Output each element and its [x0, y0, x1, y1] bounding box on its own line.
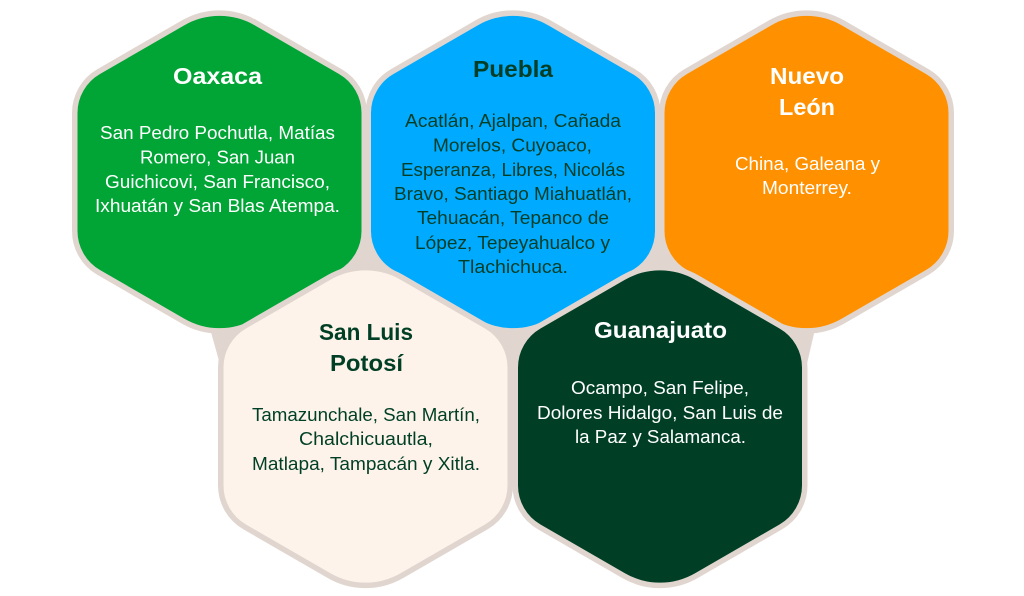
- text: Puebla municipalities: Morelos, Cuyoaco,: [433, 136, 592, 156]
- text: Puebla municipalities: Acatlán, Ajalpan, Cañada: [405, 111, 622, 131]
- text: Oaxaca municipalities: San Pedro Pochutla, Matías: [100, 123, 335, 143]
- text: Nuevo León municipalities: China, Galeana y: [735, 154, 880, 174]
- heading: Oaxaca: Oaxaca: [173, 63, 262, 89]
- text: Nuevo León municipalities: Monterrey.: [762, 178, 852, 198]
- heading: Nuevo León: [770, 63, 844, 120]
- beige connector background: [209, 225, 816, 368]
- panel: Guanajuato: [518, 270, 802, 583]
- heading: San Luis Potosí: San Luis: [319, 319, 413, 345]
- text: Guanajuato municipalities: Dolores Hidalgo, San Luis de: [537, 403, 783, 423]
- panel: Oaxaca: [78, 16, 362, 328]
- heading: San Luis Potosí: [319, 319, 413, 376]
- text: Nuevo León municipalities: [735, 154, 880, 198]
- heading: Puebla: Puebla: [473, 56, 553, 82]
- panel: Nuevo León: [664, 16, 948, 328]
- text: San Luis Potosí municipalities: [252, 405, 480, 474]
- heading: Guanajuato: Guanajuato: [594, 317, 727, 343]
- text: San Luis Potosí municipalities: Matlapa, Tampacán y Xitla.: [252, 454, 480, 474]
- text: Puebla municipalities: Esperanza, Libres, Nicolás: [401, 160, 625, 180]
- text: Guanajuato municipalities: la Paz y Salamanca.: [575, 427, 746, 447]
- text: Oaxaca municipalities: Romero, San Juan: [140, 148, 295, 168]
- text: Oaxaca municipalities: Guichicovi, San Francisco,: [105, 172, 330, 192]
- panel: Puebla: [371, 16, 655, 328]
- text: Puebla municipalities: Tlachichuca.: [458, 257, 568, 277]
- text: San Luis Potosí municipalities: Chalchicuautla,: [299, 429, 433, 449]
- text: Puebla municipalities: [394, 111, 632, 277]
- text: San Luis Potosí municipalities: Tamazunchale, San Martín,: [252, 405, 480, 425]
- text: Oaxaca municipalities: [95, 123, 340, 216]
- heading: Nuevo León: Nuevo: [770, 63, 844, 89]
- text: Oaxaca municipalities: Ixhuatán y San Blas Atempa.: [95, 196, 340, 216]
- text: Puebla municipalities: López, Tepeyahualco y: [415, 233, 610, 253]
- text: Puebla municipalities: Bravo, Santiago Miahuatlán,: [394, 184, 632, 204]
- heading: San Luis Potosí: Potosí: [330, 350, 405, 376]
- text: Puebla municipalities: Tehuacán, Tepanco de: [417, 208, 609, 228]
- panel: San Luis Potosí: [224, 270, 508, 583]
- text: Guanajuato municipalities: Ocampo, San Felipe,: [571, 378, 749, 398]
- heading: Nuevo León: León: [779, 94, 835, 120]
- text: Guanajuato municipalities: [537, 378, 783, 447]
